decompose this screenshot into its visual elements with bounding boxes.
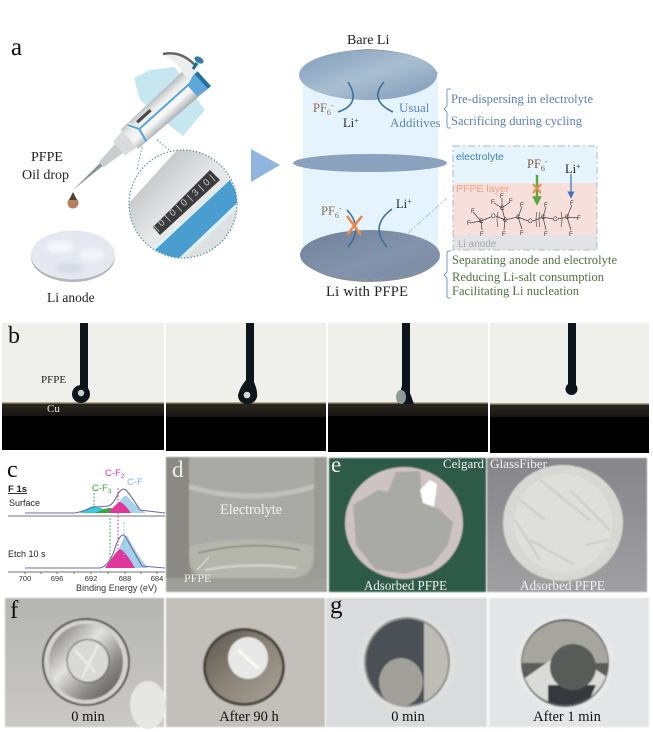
label: Etch 10 s: Etch 10 s [8,549,46,559]
x axis: 688 [119,574,131,583]
PFPE molecule structure: C [500,206,505,212]
text: PFPE benefits: Facilitating Li nucleation [452,284,580,298]
spectrum: etch 10 s [25,535,165,568]
PFPE oil drop label [22,150,69,183]
peak guide lines [94,488,124,558]
panel label d: d [172,457,184,482]
panel b: droplet contact photos [2,323,649,453]
PFPE molecule structure [467,194,581,238]
text: PFPE benefits: Reducing Li-salt consumption [452,270,605,284]
panel label b: b [8,323,20,349]
text: PFPE benefits: Separating anode and electrolyte [452,253,617,267]
connector to inset [408,198,447,233]
PFPE molecule structure: F [577,216,581,222]
label: PF6- lower: - [339,204,342,213]
heading: Bare Li: Bare Li [347,33,389,48]
PFPE molecule structure: F [570,201,574,207]
PFPE molecule structure: F [502,232,506,238]
photo b2 [166,323,326,451]
arrow: process triangle [251,149,280,182]
PFPE molecule structure: F [509,199,513,205]
arrows: bare Li ion flow [338,82,393,112]
label: After 1 min: After 1 min [533,709,602,725]
label: Usual Additives: Usual [399,100,430,115]
PFPE molecule structure: O [528,219,533,225]
peak labels: 3 [108,488,112,495]
photo b1 [2,323,164,450]
inset: PFPE layer detail: 6 [541,164,545,173]
panel label g: g [330,592,343,619]
peak labels: 2 [121,473,125,480]
heading: Li with PFPE: Li with PFPE [326,284,408,300]
PFPE molecule structure: C [541,215,546,221]
Li anode label: Li anode [47,290,95,305]
icon: Li anode disc [31,230,115,282]
photo b3 [328,323,488,452]
label: PF6- upper: 6 [327,108,331,117]
inset: PFPE layer detail: PFPE layer [456,183,510,195]
label: PF6- lower: PF [321,204,335,218]
label: PFPE with pointer: PFPE [184,571,211,585]
bracket: additives [444,89,451,128]
label: PF6- upper: - [331,101,334,110]
disc: separator [293,154,447,172]
arrows: PFPE-protected ion flow [347,209,392,247]
photo: GlassFiber separator [487,458,647,592]
panel label c: c [7,457,18,483]
inset: PFPE layer detail: electrolyte [456,151,504,163]
label: PFPE with pointer [184,557,211,585]
label: Cu substrate: Cu [47,403,60,415]
x axis [8,572,165,593]
peak labels: C-F [127,477,143,488]
spectrum: surface [8,489,165,516]
PFPE molecule structure: C [565,215,570,221]
panel g: coin cell with bare Li photos [326,592,649,727]
heading: F 1s: F 1s [8,484,27,495]
photo: f after 90 h [166,598,325,727]
PFPE oil drop label: PFPE [31,150,63,165]
photo: Celgard separator [329,458,486,592]
inset: PFPE layer detail: Li [565,162,576,176]
x axis: 684 [151,574,163,583]
label: Usual Additives: Additives [390,115,441,130]
label: PFPE droplet: PFPE [41,374,66,386]
label: Adsorbed PFPE left: Adsorbed PFPE [364,578,447,593]
PFPE molecule structure: O [491,214,496,220]
label: Usual Additives [390,100,441,130]
text: additive drawbacks: Sacrificing during cycling [451,114,583,128]
label: Li+ upper: Li [343,116,354,130]
text: PFPE benefits [452,253,617,298]
label: Adsorbed PFPE right: Adsorbed PFPE [520,578,605,593]
disc: bare Li electrode [299,50,437,100]
label: Li+ upper: + [354,116,359,125]
PFPE molecule structure: F [467,221,471,227]
PFPE molecule structure: F [520,203,524,209]
PFPE molecule structure: F [500,194,504,200]
label: 0 min: 0 min [71,709,105,725]
PFPE molecule structure: F [471,209,475,215]
panel label a: a [11,34,22,61]
inset: PFPE layer detail: - [545,157,548,166]
PFPE molecule structure: C [503,218,508,224]
x axis: Binding Energy (eV) [76,583,157,593]
inset: PFPE layer detail [453,146,597,250]
icon: pipette with PFPE oil drop [63,52,211,208]
magnified pipette counter: |0|0|0|3|0| [152,173,217,233]
peak labels: C-F [105,468,121,479]
label: Li+ lower: + [407,197,412,206]
peak labels: C-F [92,483,108,494]
x axis: 696 [51,574,63,583]
PFPE molecule structure: F [569,232,573,238]
magnified pipette counter [128,140,238,259]
photo: g after 1 min [489,598,649,727]
label: PF6- lower: 6 [335,211,339,220]
panel label f: f [10,597,19,624]
PFPE molecule structure: C [479,219,484,225]
panel d: electrolyte vial photo [166,457,327,592]
PFPE molecule structure: C [516,215,521,221]
disc: Li with PFPE electrode [300,230,440,281]
label: After 90 h: After 90 h [219,709,280,725]
inset: PFPE layer detail: PF [527,157,541,171]
label: Celgard: Celgard [443,456,484,471]
PFPE oil drop label: Oil drop [22,168,69,183]
panel label e: e [331,452,341,477]
label: 0 min: 0 min [391,709,425,725]
PFPE molecule structure: F [520,231,524,237]
panel c: F 1s XPS spectra [7,457,165,593]
bracket: PFPE benefits [444,251,451,298]
label: PF6- upper: PF [313,101,327,115]
label: GlassFiber: GlassFiber [490,456,548,471]
panel a: PFPE application schematic [11,33,617,305]
x axis: 692 [85,574,97,583]
photo: f at 0 min [5,598,166,729]
label: Electrolyte: Electrolyte [220,502,282,518]
PFPE molecule structure: F [491,200,495,206]
panel e: separator photos [329,452,647,593]
peak labels [92,468,143,495]
photo: g at 0 min [326,598,487,727]
photo b4 [490,323,649,453]
PFPE molecule structure: F [480,232,484,238]
icon: blocked PF6 cross [347,216,362,235]
inset: PFPE layer detail: + [576,162,581,171]
PFPE molecule structure: F [544,232,548,238]
label: Surface: Surface [9,498,40,508]
inset: PFPE layer detail: Li anode [458,239,497,250]
panel f: coin cell with PFPE photos [5,597,325,729]
cylinder: electrolyte column [303,75,438,255]
PFPE molecule structure: O [553,217,558,223]
x axis: 700 [19,574,31,583]
label: Li+ lower: Li [396,197,407,211]
PFPE molecule structure: F [544,203,548,209]
text: additive drawbacks: Pre-dispersing in electrolyte [451,92,593,106]
text: additive drawbacks [451,92,593,128]
